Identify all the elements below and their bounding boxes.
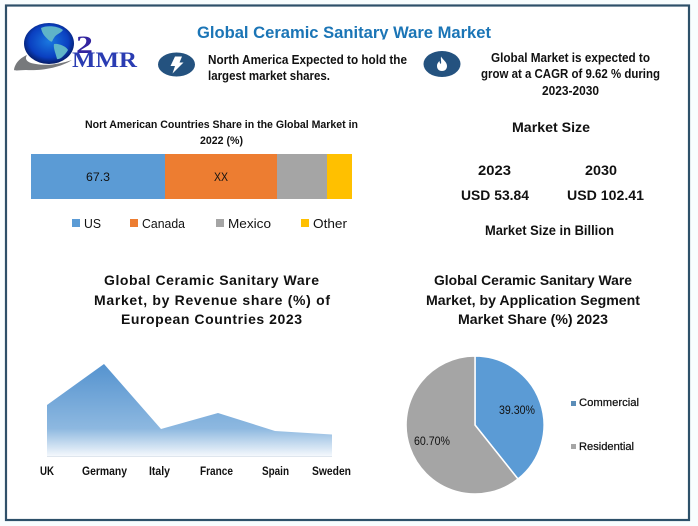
logo: MMR <box>14 23 138 72</box>
unit note: Market Size in Billion <box>485 223 614 238</box>
callout: CAGR <box>424 51 660 98</box>
legend: US <box>84 216 101 231</box>
year 2023 value <box>461 163 529 203</box>
panel: application segment <box>406 273 641 494</box>
panel: North American share chart <box>31 119 358 231</box>
pie chart: 39.30% <box>499 405 535 417</box>
callout text: Global Market is expected to <box>491 51 650 65</box>
axis labels <box>40 466 351 478</box>
chart title: European Countries 2023 <box>121 311 302 327</box>
logo swoosh <box>14 55 72 70</box>
axis labels: Spain <box>262 466 289 478</box>
callout: North America <box>158 52 407 83</box>
chart title: Market, by Application Segment <box>426 293 641 308</box>
logo continents <box>41 26 68 59</box>
logo globe <box>24 23 74 64</box>
panel: market size <box>461 119 645 238</box>
callout text: 2023-2030 <box>542 84 599 98</box>
legend: Mexico <box>228 216 271 231</box>
pie legend: Commercial <box>579 397 639 409</box>
legend: Other <box>313 216 348 231</box>
chart title: Market Share (%) 2023 <box>458 312 609 327</box>
chart title: 2022 (%) <box>200 135 243 147</box>
stacked bar: XX <box>214 172 228 184</box>
chart title: Market, by Revenue share (%) of <box>94 292 330 308</box>
axis labels: France <box>200 466 233 478</box>
year 2030 value: USD 102.41 <box>567 188 645 203</box>
chart title: Global Ceramic Sanitary Ware <box>104 272 319 288</box>
panel: European revenue share <box>40 272 351 478</box>
year 2030 value <box>567 163 645 203</box>
chart title: Global Ceramic Sanitary Ware <box>434 273 633 288</box>
callout text: largest market shares. <box>208 69 330 83</box>
callout text: grow at a CAGR of 9.62 % during <box>481 67 660 81</box>
chart title: Nort American Countries Share in the Global Market in <box>85 119 358 131</box>
stacked bar <box>31 154 352 199</box>
heading: Market Size <box>512 119 590 135</box>
year 2023 value: USD 53.84 <box>461 188 529 203</box>
logo wordmark: MMR <box>72 47 138 72</box>
legend <box>72 216 348 231</box>
title: Global Ceramic Sanitary Ware Market <box>197 23 491 42</box>
axis labels: Sweden <box>312 466 351 478</box>
icon: lightning bolt <box>158 52 195 76</box>
year 2030 value: 2030 <box>585 163 617 178</box>
logo number: 2 <box>76 32 93 59</box>
legend: Canada <box>142 216 186 231</box>
pie legend <box>571 397 639 453</box>
icon: flame <box>424 51 460 77</box>
pie chart <box>406 356 544 494</box>
callout text: North America Expected to hold the <box>208 53 407 67</box>
stacked bar: 67.3 <box>86 172 110 184</box>
axis labels: Italy <box>149 466 171 478</box>
pie legend: Residential <box>579 441 634 453</box>
axis labels: Germany <box>82 466 128 478</box>
year 2023 value: 2023 <box>478 163 512 178</box>
pie chart: 60.70% <box>414 436 450 448</box>
axis labels: UK <box>40 466 55 478</box>
area chart <box>47 364 332 456</box>
